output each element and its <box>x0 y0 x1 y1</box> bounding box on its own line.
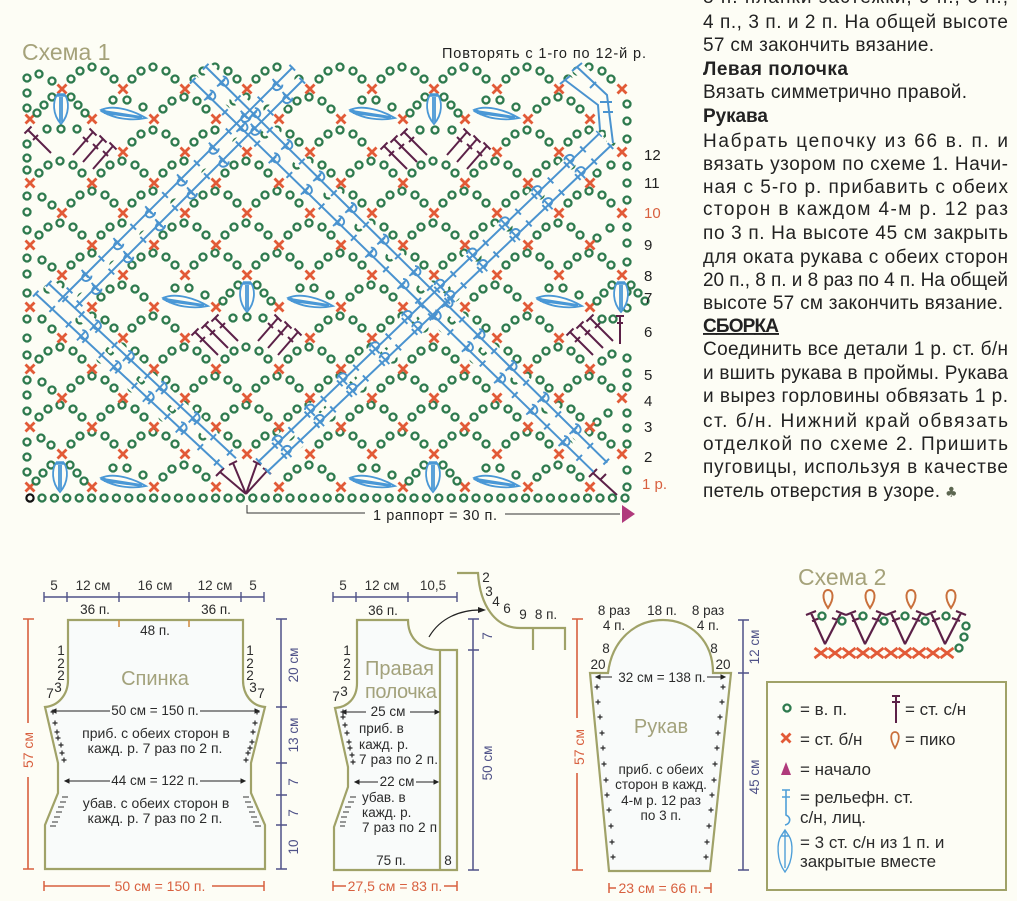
height dimensions: 45 см <box>747 760 762 794</box>
top dimensions: 16 см <box>138 578 172 593</box>
sleeve cap labels: 8 <box>602 641 610 656</box>
panel: right front piece (Правая полочка): Правая <box>365 658 434 680</box>
right height dimensions: 7 <box>286 778 301 786</box>
top dimensions <box>44 578 264 602</box>
text column: instructions: отделкой по схеме 2. Пришить <box>703 434 1008 455</box>
panel: back piece (Спинка): приб. с обеих сторон в <box>82 725 230 741</box>
text column: instructions: сторон в каждом 4-м р. 12 раз <box>703 199 1008 220</box>
row numbers: 11 <box>644 175 660 192</box>
panel: right front piece (Правая полочка): 8 <box>444 853 452 868</box>
neckline detail: 9 <box>519 607 527 622</box>
left height dimension: 57 см <box>20 732 36 768</box>
panel: back piece (Спинка): 44 см = 122 п. <box>111 773 199 788</box>
neckline detail: 8 п. <box>535 607 557 622</box>
row numbers: 4 <box>644 393 652 410</box>
neckline detail: 2 <box>482 570 490 585</box>
panel: right front piece (Правая полочка): убав. в <box>362 790 406 805</box>
height dimensions: 12 см <box>747 630 762 664</box>
right height dimensions: 20 см <box>286 648 301 682</box>
sleeve cap labels: 8 раз <box>598 603 630 618</box>
legend: closed stitches: закрытые вместе <box>800 852 936 871</box>
text column: instructions: 20 п., 8 п. и 8 раз по 4 п. На общей <box>703 270 1008 291</box>
title: Схема 1: Схема 1 <box>22 39 110 65</box>
panel: right front piece (Правая полочка) <box>332 578 495 894</box>
single crochet marks <box>26 84 626 492</box>
armhole numbers <box>46 643 265 701</box>
panel: sleeve (Рукав): Рукав <box>634 716 688 738</box>
sleeve cap labels: 8 <box>710 641 718 656</box>
chart: crochet stitch diagram 1 <box>24 61 648 502</box>
panel: right front piece (Правая полочка): 22 см <box>380 774 414 789</box>
top dimensions: 5 <box>339 578 347 593</box>
arrow: neckline to detail <box>429 607 486 637</box>
leaf motifs: three stitches closed together <box>32 94 648 492</box>
panel: right front piece (Правая полочка): 75 п. <box>376 853 406 868</box>
panel: back piece (Спинка): 36 п. <box>201 602 231 617</box>
row numbers: 8 <box>644 268 652 285</box>
note: repeat rows: Повторять с 1-го по 12-й р. <box>442 46 646 62</box>
top dimensions: 5 <box>249 578 257 593</box>
bottom width dimension: 50 см = 150 п. <box>115 878 205 894</box>
right edge chain <box>594 100 630 490</box>
armhole numbers: 3 <box>340 684 348 699</box>
height dimension 57 cm between front and sleeve <box>571 619 587 870</box>
top dimensions <box>333 578 457 602</box>
legend: double crochet: = ст. с/н <box>905 700 966 719</box>
panel: right front piece (Правая полочка): кажд. р. <box>359 737 408 752</box>
legend: raised stitch: с/н, лиц. <box>800 808 866 827</box>
panel: right front piece (Правая полочка): полочка <box>365 681 438 703</box>
text column: instructions: пуговицы, используя в качестве <box>703 457 1008 478</box>
text column: instructions: по 3 п. На высоте 45 см закрыть <box>703 223 1008 244</box>
height dimension 57 cm between front and sleeve: 57 см <box>571 729 587 765</box>
armhole numbers: 7 <box>46 686 54 701</box>
panel: right front piece (Правая полочка): приб. в <box>359 721 404 736</box>
neckline detail: 3 <box>485 584 493 599</box>
height dimension <box>468 619 495 870</box>
armhole numbers: 2 <box>343 668 351 683</box>
increase marks <box>50 710 260 762</box>
legend: start: = начало <box>800 760 871 779</box>
picots <box>823 590 956 608</box>
armhole numbers: 7 <box>257 686 265 701</box>
left height dimension <box>20 619 36 869</box>
text column: instructions: высоте 57 см закончить вязание. <box>703 293 1003 314</box>
text column: instructions: петель отверстия в узоре. <box>703 481 940 502</box>
right height dimensions <box>276 619 301 869</box>
row numbers: 10 <box>644 205 661 222</box>
panel: back piece (Спинка): 50 см = 150 п. <box>111 703 199 718</box>
right height dimensions: 13 см <box>286 718 301 752</box>
sleeve cap labels: 8 раз <box>692 603 724 618</box>
row numbers: 3 <box>644 419 652 436</box>
text column: instructions: 57 см закончить вязание. <box>703 35 934 56</box>
panel: sleeve (Рукав): 32 см = 138 п. <box>618 670 706 685</box>
left edge chain <box>24 70 56 476</box>
panel: back piece (Спинка): кажд. р. 7 раз по 2 п. <box>88 810 222 826</box>
sleeve cap labels: 4 п. <box>697 618 719 633</box>
text column: instructions: и вырез горловины обвязать 1 р. <box>703 386 1008 407</box>
armhole numbers: 2 <box>343 656 351 671</box>
text column: instructions: Набрать цепочку из 66 в. п. и <box>703 131 1008 152</box>
sleeve cap labels: 20 <box>590 657 606 672</box>
neckline detail <box>457 570 565 650</box>
text column: instructions: для оката рукава с обеих сторон <box>703 247 1008 268</box>
text column: instructions: СБОРКА <box>703 316 779 337</box>
text column: instructions: ная с 5-го р. прибавить с обеих <box>703 177 1008 198</box>
chain circles <box>818 612 970 652</box>
neckline detail: 6 <box>503 601 511 616</box>
row numbers: 7 <box>644 290 652 307</box>
armhole numbers: 1 <box>343 643 351 658</box>
panel: sleeve (Рукав): по 3 п. <box>641 808 681 823</box>
legend: chain: = в. п. <box>800 700 847 719</box>
increase marks <box>594 684 726 860</box>
panel: sleeve (Рукав): 4-м р. 12 раз <box>621 793 701 808</box>
sleeve cap labels: 18 п. <box>647 603 677 618</box>
width arrows <box>52 709 259 783</box>
row numbers <box>642 147 667 493</box>
panel: back piece (Спинка): 36 п. <box>80 602 110 617</box>
neckline detail: 4 <box>492 594 500 609</box>
top dimensions: 10,5 <box>420 578 446 593</box>
armhole numbers: 3 <box>54 680 62 695</box>
legend: double crochet <box>892 696 966 723</box>
row numbers: 2 <box>644 449 652 466</box>
panel: right front piece (Правая полочка): 36 п. <box>368 603 398 618</box>
top dimensions: 12 см <box>198 578 232 593</box>
text column: instructions <box>703 0 1008 502</box>
height dimension: 7 <box>480 632 495 640</box>
panel: right front piece (Правая полочка): 7 раз по 2 п <box>362 820 437 835</box>
text column: instructions: вязать узором по схеме 1. Начи- <box>703 154 1008 175</box>
chart: edging diagram 2 <box>806 590 970 658</box>
text column: instructions: ♣ <box>945 485 958 501</box>
arches of chain stitches <box>36 64 614 480</box>
text column: instructions: Левая полочка <box>703 59 848 80</box>
text column: instructions: и вшить рукава в проймы. Рукава <box>703 363 1008 384</box>
panel: back piece (Спинка): кажд. р. 7 раз по 2 п. <box>88 740 222 756</box>
armhole numbers <box>332 643 351 704</box>
panel: right front piece (Правая полочка): кажд. р. <box>362 805 411 820</box>
bottom width dimension <box>44 878 264 894</box>
rapport bracket: 1 раппорт = 30 п. <box>373 508 497 524</box>
top dimensions: 12 см <box>365 578 399 593</box>
panel: sleeve (Рукав): приб. с обеих <box>619 762 704 777</box>
panel: back piece (Спинка): убав. с обеих сторон в <box>83 795 229 811</box>
armhole numbers: 2 <box>246 668 254 683</box>
increase marks <box>340 710 356 764</box>
bottom foundation chain <box>26 494 628 502</box>
panel: right front piece (Правая полочка): 25 см <box>371 704 405 719</box>
row numbers: 9 <box>644 237 652 254</box>
row numbers: 1 р. <box>642 476 667 493</box>
armhole numbers: 2 <box>246 656 254 671</box>
armhole numbers: 1 <box>57 643 65 658</box>
double crochet bundles <box>24 126 624 495</box>
armhole numbers: 7 <box>332 689 340 704</box>
row numbers: 6 <box>644 324 652 341</box>
text column: instructions: Вязать симметрично правой. <box>703 82 967 103</box>
row numbers: 5 <box>644 367 652 384</box>
legend: closed stitches <box>778 830 944 872</box>
sleeve cap labels <box>590 603 731 672</box>
top dimensions: 5 <box>50 578 58 593</box>
sleeve cap labels: 20 <box>715 657 731 672</box>
text column: instructions: ст. б/н. Нижний край обвязать <box>703 411 1008 432</box>
decrease marks <box>50 797 261 826</box>
right height dimensions: 10 <box>286 839 301 855</box>
rapport bracket <box>247 505 620 524</box>
text column: instructions: Рукава <box>703 106 768 127</box>
top dimensions: 12 см <box>76 578 110 593</box>
bottom width dimension: 23 см = 66 п. <box>619 880 701 896</box>
legend: raised stitch <box>782 788 913 827</box>
row numbers: 12 <box>644 147 661 164</box>
cleared paths under raised stitches <box>35 66 613 472</box>
bottom width dimension: 27,5 см = 83 п. <box>348 878 442 894</box>
icon: start triangle <box>622 505 635 523</box>
height dimensions <box>738 620 762 870</box>
legend: single crochet: = ст. б/н <box>800 730 862 749</box>
width arrows <box>342 710 439 784</box>
sleeve cap labels: 4 п. <box>603 618 625 633</box>
armhole numbers: 1 <box>246 643 254 658</box>
panel: sleeve (Рукав): сторон в кажд. <box>615 777 707 792</box>
text column: instructions: 4 п., 3 п. и 2 п. На общей высоте <box>703 12 1008 33</box>
panel: right front piece (Правая полочка): 7 раз по 2 п. <box>359 752 438 767</box>
armhole numbers: 2 <box>57 668 65 683</box>
panel: back piece (Спинка): Спинка <box>121 668 190 690</box>
title: Схема 2: Схема 2 <box>798 564 886 590</box>
right height dimensions: 7 <box>286 809 301 817</box>
text column: instructions: Соединить все детали 1 р. ст. б/н <box>703 339 1008 360</box>
legend: raised stitch: = рельефн. ст. <box>800 788 913 807</box>
height dimension: 50 см <box>480 746 495 780</box>
raised stitch diagonals <box>31 61 616 476</box>
panel: legend <box>767 682 1006 890</box>
legend: picot: = пико <box>905 730 955 749</box>
legend: closed stitches: = 3 ст. с/н из 1 п. и <box>800 833 944 852</box>
armhole numbers: 2 <box>57 656 65 671</box>
panel: back piece (Спинка): 48 п. <box>140 623 170 638</box>
decrease marks <box>340 797 356 826</box>
single crochet row <box>814 648 954 658</box>
armhole numbers: 3 <box>249 680 257 695</box>
panel: back piece (Спинка) <box>20 578 301 894</box>
panel: sleeve (Рукав) <box>590 603 762 896</box>
V stitches <box>806 611 966 644</box>
